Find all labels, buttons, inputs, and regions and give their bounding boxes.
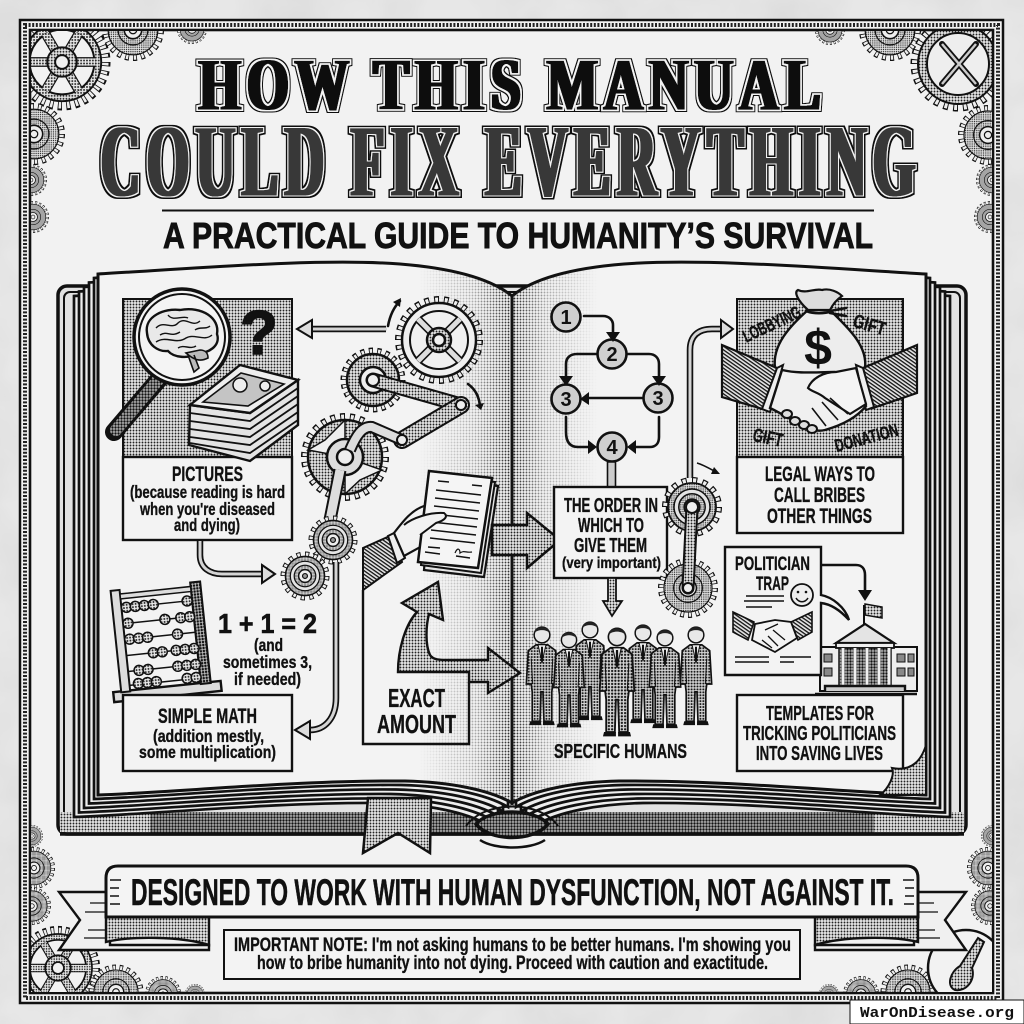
left page bbox=[98, 260, 512, 810]
banner right tail bbox=[815, 892, 966, 950]
watermark bbox=[850, 1000, 1024, 1024]
large spoked gear bbox=[399, 300, 479, 380]
pictures label: and dying) bbox=[174, 515, 240, 535]
panel: order in which to give them: WHICH TO bbox=[578, 515, 644, 537]
legal ways label bbox=[765, 463, 875, 528]
pictures label: PICTURES bbox=[172, 463, 243, 486]
right page gears with crank bbox=[662, 481, 718, 614]
corner gears and flask: bottom right bbox=[820, 825, 992, 992]
panel: templates: INTO SAVING LIVES bbox=[756, 743, 883, 765]
panel: order in which to give them: THE ORDER IN bbox=[564, 495, 658, 517]
important note: how to bribe humanity into not dying. Proceed with caution and exactitude. bbox=[257, 953, 768, 974]
pictures label bbox=[130, 463, 285, 535]
icon: brain bbox=[147, 309, 218, 372]
icon: handshake bbox=[722, 345, 917, 433]
panel: exact amount: AMOUNT bbox=[377, 709, 456, 739]
important note: IMPORTANT NOTE: I'm not asking humans to be better humans. I'm showing you bbox=[234, 935, 791, 956]
arrow: order to humans bbox=[603, 578, 622, 616]
gear 4 bbox=[311, 518, 355, 562]
right page bbox=[512, 260, 926, 810]
corner gears: bottom left bbox=[31, 825, 205, 992]
pictures label: when you're diseased bbox=[139, 499, 275, 519]
icon: abacus bbox=[103, 580, 222, 702]
gear 5 bbox=[283, 554, 327, 598]
panel: politician trap document: TRAP bbox=[756, 574, 789, 595]
panel: legal bribes bbox=[722, 289, 917, 533]
step circles: 4 bbox=[606, 437, 618, 459]
step circles: 3 bbox=[560, 389, 572, 411]
flowchart: order of steps bbox=[552, 302, 672, 487]
legal ways label: OTHER THINGS bbox=[767, 505, 872, 528]
panel: templates: TEMPLATES FOR bbox=[766, 703, 874, 725]
group of people bbox=[526, 622, 712, 736]
connector to box bbox=[608, 462, 616, 487]
gear train bbox=[283, 300, 484, 598]
icon: hand holding document bbox=[363, 471, 498, 590]
arrow: gears to pictures bbox=[297, 298, 401, 338]
icon: money bag: $ bbox=[804, 320, 832, 376]
step circles: 1 bbox=[560, 307, 572, 329]
corner gears and wrench: top right bbox=[815, 31, 992, 233]
icon: money bag bbox=[775, 289, 865, 381]
math equation note: 1 + 1 = 2 bbox=[218, 608, 317, 639]
panel: templates bbox=[737, 695, 903, 771]
icon: smiley bbox=[791, 584, 813, 606]
icon: small handshake bbox=[733, 612, 812, 652]
panel: politician trap document: POLITICIAN bbox=[735, 554, 810, 575]
panel: exact amount bbox=[363, 590, 469, 744]
page stack bbox=[74, 266, 950, 825]
icon: magnifying glass with brain bbox=[114, 289, 230, 432]
arrow: exact amount loop bbox=[398, 582, 520, 693]
banner bbox=[59, 866, 966, 950]
bag labels: GIFT bbox=[851, 311, 888, 340]
panel: simple math: SIMPLE MATH bbox=[158, 705, 257, 728]
panel: templates: TRICKING POLITICIANS bbox=[743, 723, 896, 745]
bag labels: LOBBYING bbox=[739, 302, 804, 346]
panel: simple math bbox=[123, 695, 292, 771]
title bbox=[101, 44, 922, 218]
bag labels: GIFT bbox=[751, 425, 785, 452]
math equation note: (and bbox=[254, 635, 283, 655]
arrow: gear to simple math bbox=[295, 562, 336, 739]
important note bbox=[224, 930, 800, 979]
arrow: trap to capitol bbox=[822, 565, 872, 601]
arrow: gears to bribes panel bbox=[690, 320, 733, 478]
bag labels: DONATION bbox=[833, 420, 900, 456]
bookmark ribbon bbox=[363, 798, 431, 853]
icon: stack of photos bbox=[189, 365, 298, 461]
question mark: ? bbox=[240, 299, 278, 368]
panel: simple math: (addition mestly, bbox=[153, 726, 264, 746]
panel: simple math: some multiplication) bbox=[139, 742, 276, 762]
page curl bbox=[880, 745, 926, 795]
spine bulge bbox=[466, 806, 558, 848]
book cover bbox=[58, 286, 966, 834]
banner folds bbox=[106, 917, 209, 945]
step circles bbox=[552, 302, 672, 462]
watermark: WarOnDisease.org bbox=[860, 1005, 1014, 1022]
gear 2 bbox=[344, 351, 402, 409]
bag labels bbox=[739, 302, 900, 456]
panel: exact amount: EXACT bbox=[388, 683, 445, 713]
specific humans label: SPECIFIC HUMANS bbox=[554, 741, 687, 763]
panel: politician trap document bbox=[725, 547, 849, 675]
flow arrows bbox=[559, 316, 666, 454]
arrow: pictures to gear bbox=[200, 541, 275, 583]
panel: order in which to give them bbox=[554, 487, 667, 578]
step circles: 2 bbox=[606, 344, 618, 366]
panel: pictures bbox=[114, 289, 298, 540]
gear 3 bbox=[305, 417, 385, 497]
panel: order in which to give them: GIVE THEM bbox=[574, 535, 647, 557]
banner main ribbon bbox=[106, 866, 918, 917]
step circles: 3 bbox=[652, 388, 664, 410]
pictures label: (because reading is hard bbox=[130, 482, 285, 502]
icon: capitol building bbox=[815, 604, 917, 694]
open book bbox=[58, 260, 966, 853]
corner gears: top left bbox=[31, 31, 207, 233]
arrow: document to order box bbox=[492, 513, 560, 568]
math equation note bbox=[218, 608, 317, 689]
legal ways label: CALL BRIBES bbox=[774, 484, 865, 507]
banner left tail bbox=[59, 892, 209, 950]
panel: order in which to give them: (very important) bbox=[562, 555, 661, 572]
subtitle: A PRACTICAL GUIDE TO HUMANITY’S SURVIVAL bbox=[163, 215, 873, 256]
math equation note: sometimes 3, bbox=[223, 652, 312, 672]
legal ways label: LEGAL WAYS TO bbox=[765, 463, 875, 486]
math equation note: if needed) bbox=[234, 669, 301, 689]
crank arms bbox=[330, 374, 484, 520]
